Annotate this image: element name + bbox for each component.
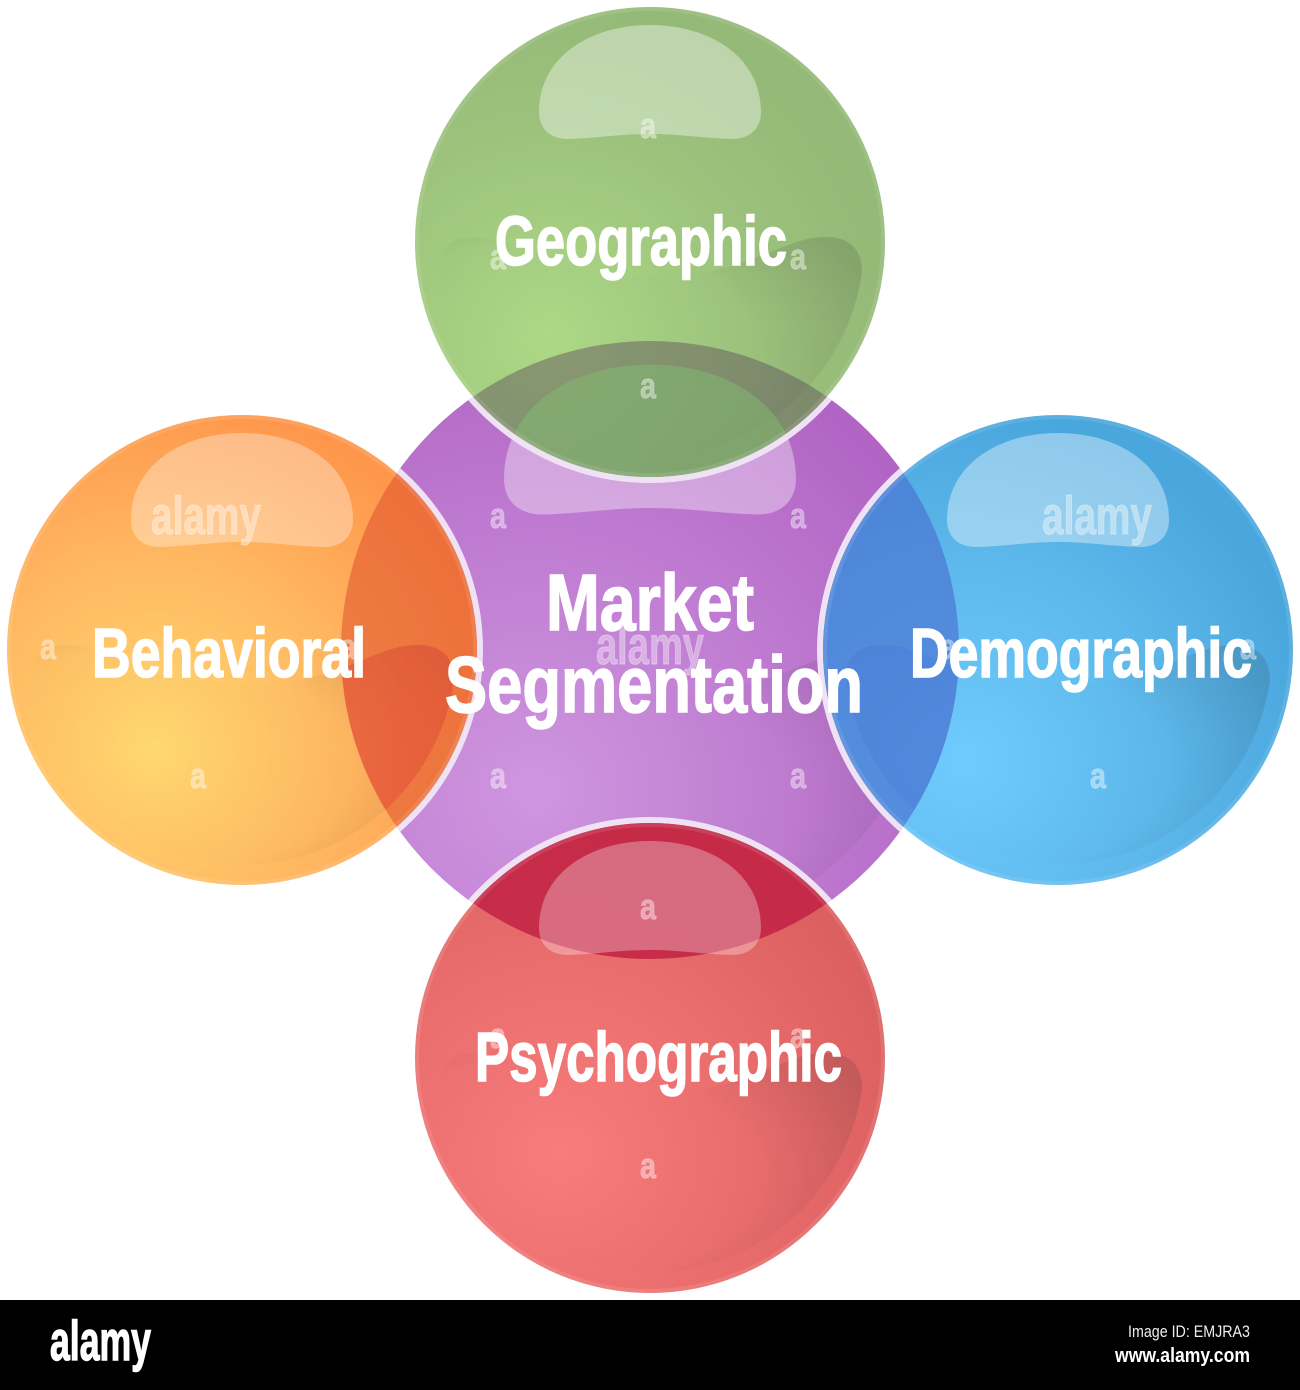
- circle: Demographic: [823, 415, 1293, 885]
- website: www.alamy.com: [1114, 1345, 1250, 1367]
- circle: Geographic: a: [640, 365, 657, 406]
- image id: Image ID: EMJRA3: [1128, 1322, 1250, 1341]
- circle: Behavioral: alamy: [151, 486, 261, 546]
- circle: Psychographic: a: [640, 886, 657, 927]
- circle: Psychographic: a: [640, 1145, 657, 1186]
- circle: Demographic: alamy: [1042, 486, 1152, 546]
- circle: Market Segmentation: alamy: [596, 616, 704, 676]
- circle: Behavioral: a: [40, 626, 57, 667]
- footer bar: [0, 1300, 1300, 1390]
- circle: Behavioral: a: [190, 755, 207, 796]
- circle: Geographic: a: [490, 236, 507, 277]
- label: Market Segmentation: [445, 558, 863, 729]
- circle: Geographic: a: [790, 236, 807, 277]
- label: Psychographic: Psychographic: [475, 1018, 842, 1096]
- circle: Psychographic: a: [490, 1015, 507, 1056]
- label: Market Segmentation: Segmentation: [445, 640, 863, 729]
- circle: Market Segmentation: a: [490, 495, 507, 536]
- circle: Market Segmentation: a: [790, 495, 807, 536]
- circle: Psychographic: [415, 823, 885, 1293]
- circle: Market Segmentation: [341, 341, 959, 959]
- circle: Psychographic: a: [790, 1015, 807, 1056]
- circle: Demographic: a: [1240, 626, 1257, 667]
- circle outlines over the center circle: [397, 397, 904, 903]
- footer logo: alamy: [50, 1309, 151, 1372]
- circle: Behavioral: a: [340, 626, 357, 667]
- circle: Demographic: a: [940, 626, 957, 667]
- circle: Behavioral: [7, 415, 477, 885]
- label: Market Segmentation: Market: [546, 558, 754, 647]
- circle: Geographic: a: [640, 105, 657, 146]
- circle: Market Segmentation: a: [490, 755, 507, 796]
- label: Geographic: Geographic: [495, 202, 787, 280]
- circle: Geographic: [415, 7, 885, 477]
- circle: Market Segmentation: a: [790, 755, 807, 796]
- label: Behavioral: Behavioral: [92, 614, 366, 692]
- circle: Demographic: a: [1090, 755, 1107, 796]
